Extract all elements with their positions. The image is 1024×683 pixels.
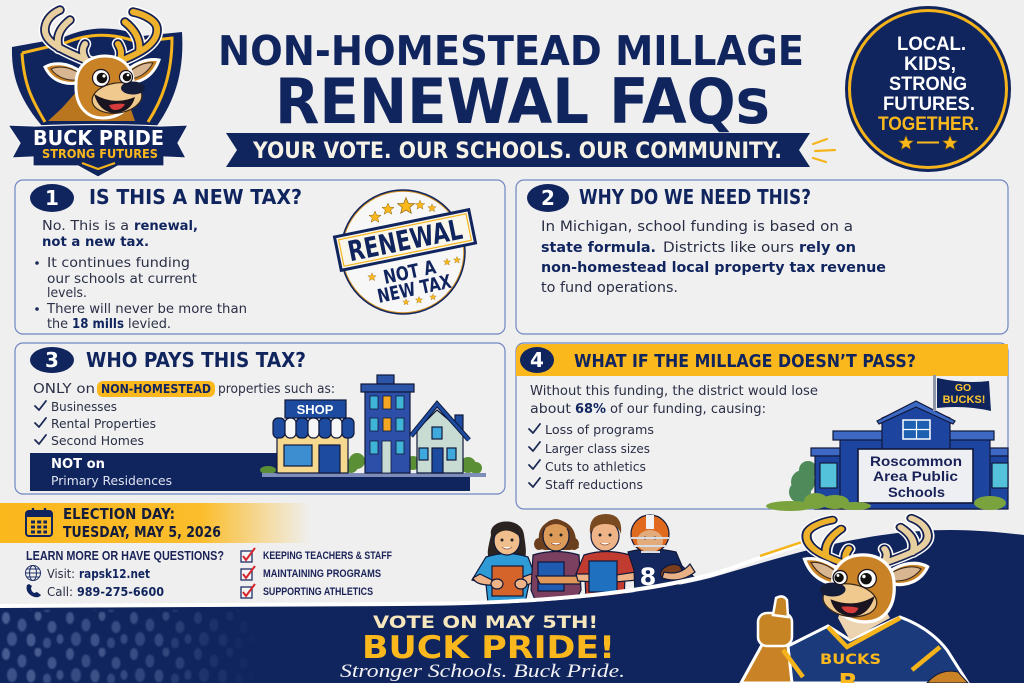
contact info: [26, 549, 224, 599]
panel 3: who pays this tax: [15, 343, 505, 494]
tagline text: YOUR VOTE. OUR SCHOOLS. OUR COMMUNITY.: [252, 138, 782, 164]
mascot neck: [838, 600, 890, 640]
logo neck: [48, 90, 135, 121]
flag: [933, 375, 991, 411]
intro line: NON-HOMESTEAD: [101, 381, 211, 396]
flag: BUCKS!: [943, 394, 985, 406]
student with orange book: [472, 521, 536, 603]
football player: [628, 515, 695, 594]
navy wave: [0, 530, 1024, 683]
consequence list: Larger class sizes: [545, 441, 650, 456]
number badge 3: 3: [45, 348, 59, 372]
wave highlight: [0, 545, 800, 606]
logo text: Buck Pride: BUCK PRIDE: [33, 126, 164, 150]
contact info: 989-275-6600: [77, 584, 164, 599]
center gable: [882, 404, 950, 450]
mascot forearm: [927, 671, 968, 683]
renewal stamp: NEW TAX: [375, 271, 454, 308]
inner wings: [840, 439, 990, 509]
flag: GO: [955, 382, 971, 394]
tree: [789, 461, 817, 503]
crowd silhouette: [2, 610, 232, 683]
renewal stamp: [334, 190, 476, 314]
heading 3: WHO PAYS THIS TAX?: [86, 348, 306, 372]
house: [411, 404, 469, 473]
property list: Second Homes: [51, 433, 144, 448]
logo deer head: [45, 56, 159, 118]
title: [218, 27, 804, 138]
consequence list: Staff reductions: [545, 477, 643, 492]
explanation text: non-homestead local property tax revenue: [541, 260, 886, 276]
school sign: Roscommon: [870, 453, 962, 469]
school sign: [858, 449, 973, 503]
number badge 3: [30, 347, 74, 373]
benefits checklist: KEEPING TEACHERS & STAFF: [263, 550, 392, 562]
mascot thumb and fist: [758, 596, 792, 646]
logo text: Strong Futures: STRONG FUTURES: [42, 147, 158, 161]
explanation text: Districts like ours: [663, 240, 794, 256]
title line 1: NON-HOMESTEAD MILLAGE: [218, 27, 804, 75]
intro line: ONLY on: [33, 381, 95, 397]
shop: [273, 400, 354, 473]
wave accent stripe: [760, 541, 805, 556]
number badge 2: 2: [541, 186, 555, 210]
answer text: It continues funding: [47, 255, 190, 271]
school sign: Schools: [888, 484, 945, 500]
consequence text: [530, 383, 818, 417]
apartment building: [361, 375, 414, 473]
heading 2: WHY DO WE NEED THIS?: [579, 185, 811, 209]
buildings illustration: [260, 375, 486, 477]
football player: 8: [640, 563, 656, 591]
panel 2: why do we need this: [516, 180, 1008, 334]
school illustration: [766, 375, 1008, 511]
heading 4: WHAT IF THE MILLAGE DOESN’T PASS?: [574, 351, 916, 372]
bushes: [766, 493, 1006, 511]
property list: [35, 399, 156, 448]
logo antlers: [45, 10, 157, 62]
benefits checklist: [241, 548, 392, 598]
buck pride line: BUCK PRIDE!: [362, 630, 615, 666]
mascot head: [805, 555, 928, 622]
icon: phone: [27, 584, 41, 597]
logo ribbon: [8, 124, 188, 177]
ground: [262, 473, 486, 477]
number badge 4: [520, 347, 554, 373]
badge stars: [899, 136, 957, 149]
calendar icon: [26, 508, 52, 536]
call line: Call:: [47, 584, 73, 599]
badge text: LOCAL.: [897, 33, 966, 55]
not on primary residences band: Primary Residences: [51, 473, 172, 488]
mascot arm: [741, 640, 795, 683]
outer wings: [811, 448, 1008, 456]
title line 2: RENEWAL FAQs: [275, 65, 770, 138]
election day band: TUESDAY, MAY 5, 2026: [63, 523, 221, 541]
consequence text: 68%: [575, 401, 606, 417]
not on primary residences band: [30, 453, 470, 491]
benefits checklist: SUPPORTING ATHLETICS: [263, 586, 373, 598]
election date text: ELECTION DAY:: [63, 505, 175, 523]
contact info: rapsk12.net: [79, 566, 150, 581]
answer text: 18 mills: [72, 316, 124, 332]
logo shield gold outline: [22, 35, 172, 122]
consequence text: Without this funding, the district would lose: [530, 383, 818, 399]
intro line: [33, 381, 335, 397]
student with red shirt: [576, 514, 637, 600]
logo gold chevron: [82, 163, 115, 169]
school sign: Area Public: [873, 468, 958, 484]
property list: Businesses: [51, 399, 117, 414]
vote line: VOTE ON MAY 5TH!: [373, 613, 598, 633]
answer text: not a new tax.: [42, 234, 149, 250]
jersey trim: [783, 618, 940, 677]
script slogan: Stronger Schools. Buck Pride.: [340, 661, 625, 682]
explanation text: rely on: [799, 240, 856, 256]
answer text: our schools at current: [47, 271, 197, 287]
call to action: [340, 613, 625, 682]
logo shield: [12, 28, 182, 172]
contact info: LEARN MORE OR HAVE QUESTIONS?: [26, 549, 224, 563]
badge text: [878, 33, 979, 135]
election day band: [0, 503, 310, 543]
footer wave: [0, 530, 1024, 683]
shop: SHOP: [297, 402, 334, 417]
panel 4: what if the millage doesn't pass: [516, 343, 1008, 511]
answer text: [35, 218, 247, 332]
answer text: renewal,: [134, 218, 198, 234]
consequence list: Loss of programs: [545, 422, 654, 437]
number badge 2: [527, 184, 569, 212]
property list: Rental Properties: [51, 416, 156, 431]
consequence list: [529, 422, 654, 492]
mascot jersey: [788, 617, 968, 683]
answer text: levied.: [128, 316, 171, 332]
explanation text: to fund operations.: [541, 280, 678, 296]
students illustration: [472, 514, 695, 603]
badge: Local kids: [845, 6, 1011, 172]
tagline banner: [226, 133, 810, 167]
mascot antlers: [807, 518, 928, 565]
number badge 1: [30, 184, 74, 212]
answer text: the: [47, 316, 68, 332]
benefits checklist: MAINTAINING PROGRAMS: [263, 568, 381, 580]
badge text: STRONG: [889, 73, 967, 95]
visit line: Visit:: [47, 566, 75, 581]
bushes: [260, 453, 482, 474]
consequence text: about: [530, 401, 571, 417]
badge text: FUTURES.: [883, 93, 975, 115]
student with purple shirt: [531, 519, 582, 602]
icon: globe: [26, 566, 40, 580]
heading 1: IS THIS A NEW TAX?: [89, 185, 302, 209]
answer text: levels.: [47, 285, 87, 301]
number badge 1: 1: [45, 186, 59, 210]
explanation text: [541, 219, 886, 296]
explanation text: In Michigan, school funding is based on a: [541, 219, 853, 235]
renewal stamp: NOT A: [381, 256, 438, 289]
consequence text: of our funding, causing:: [610, 401, 766, 417]
renewal stamp: RENEWAL: [345, 213, 465, 268]
panel 1: is this a new tax: [15, 180, 505, 334]
answer text: There will never be more than: [46, 301, 247, 317]
number badge 4: 4: [530, 348, 544, 372]
consequence list: Cuts to athletics: [545, 459, 646, 474]
jersey text: BUCKS: [820, 652, 881, 668]
badge text: TOGETHER.: [878, 113, 979, 135]
not on primary residences band: NOT on: [51, 457, 105, 472]
logo: Buck Pride shield: [8, 10, 188, 177]
gold header: [516, 344, 1008, 376]
intro line: properties such as:: [218, 381, 335, 397]
badge text: KIDS,: [904, 53, 956, 75]
explanation text: state formula.: [541, 240, 656, 256]
answer text: No. This is a: [42, 218, 129, 234]
mascot: deer with thumbs up: [741, 518, 968, 683]
sparkle lines: [813, 139, 835, 162]
